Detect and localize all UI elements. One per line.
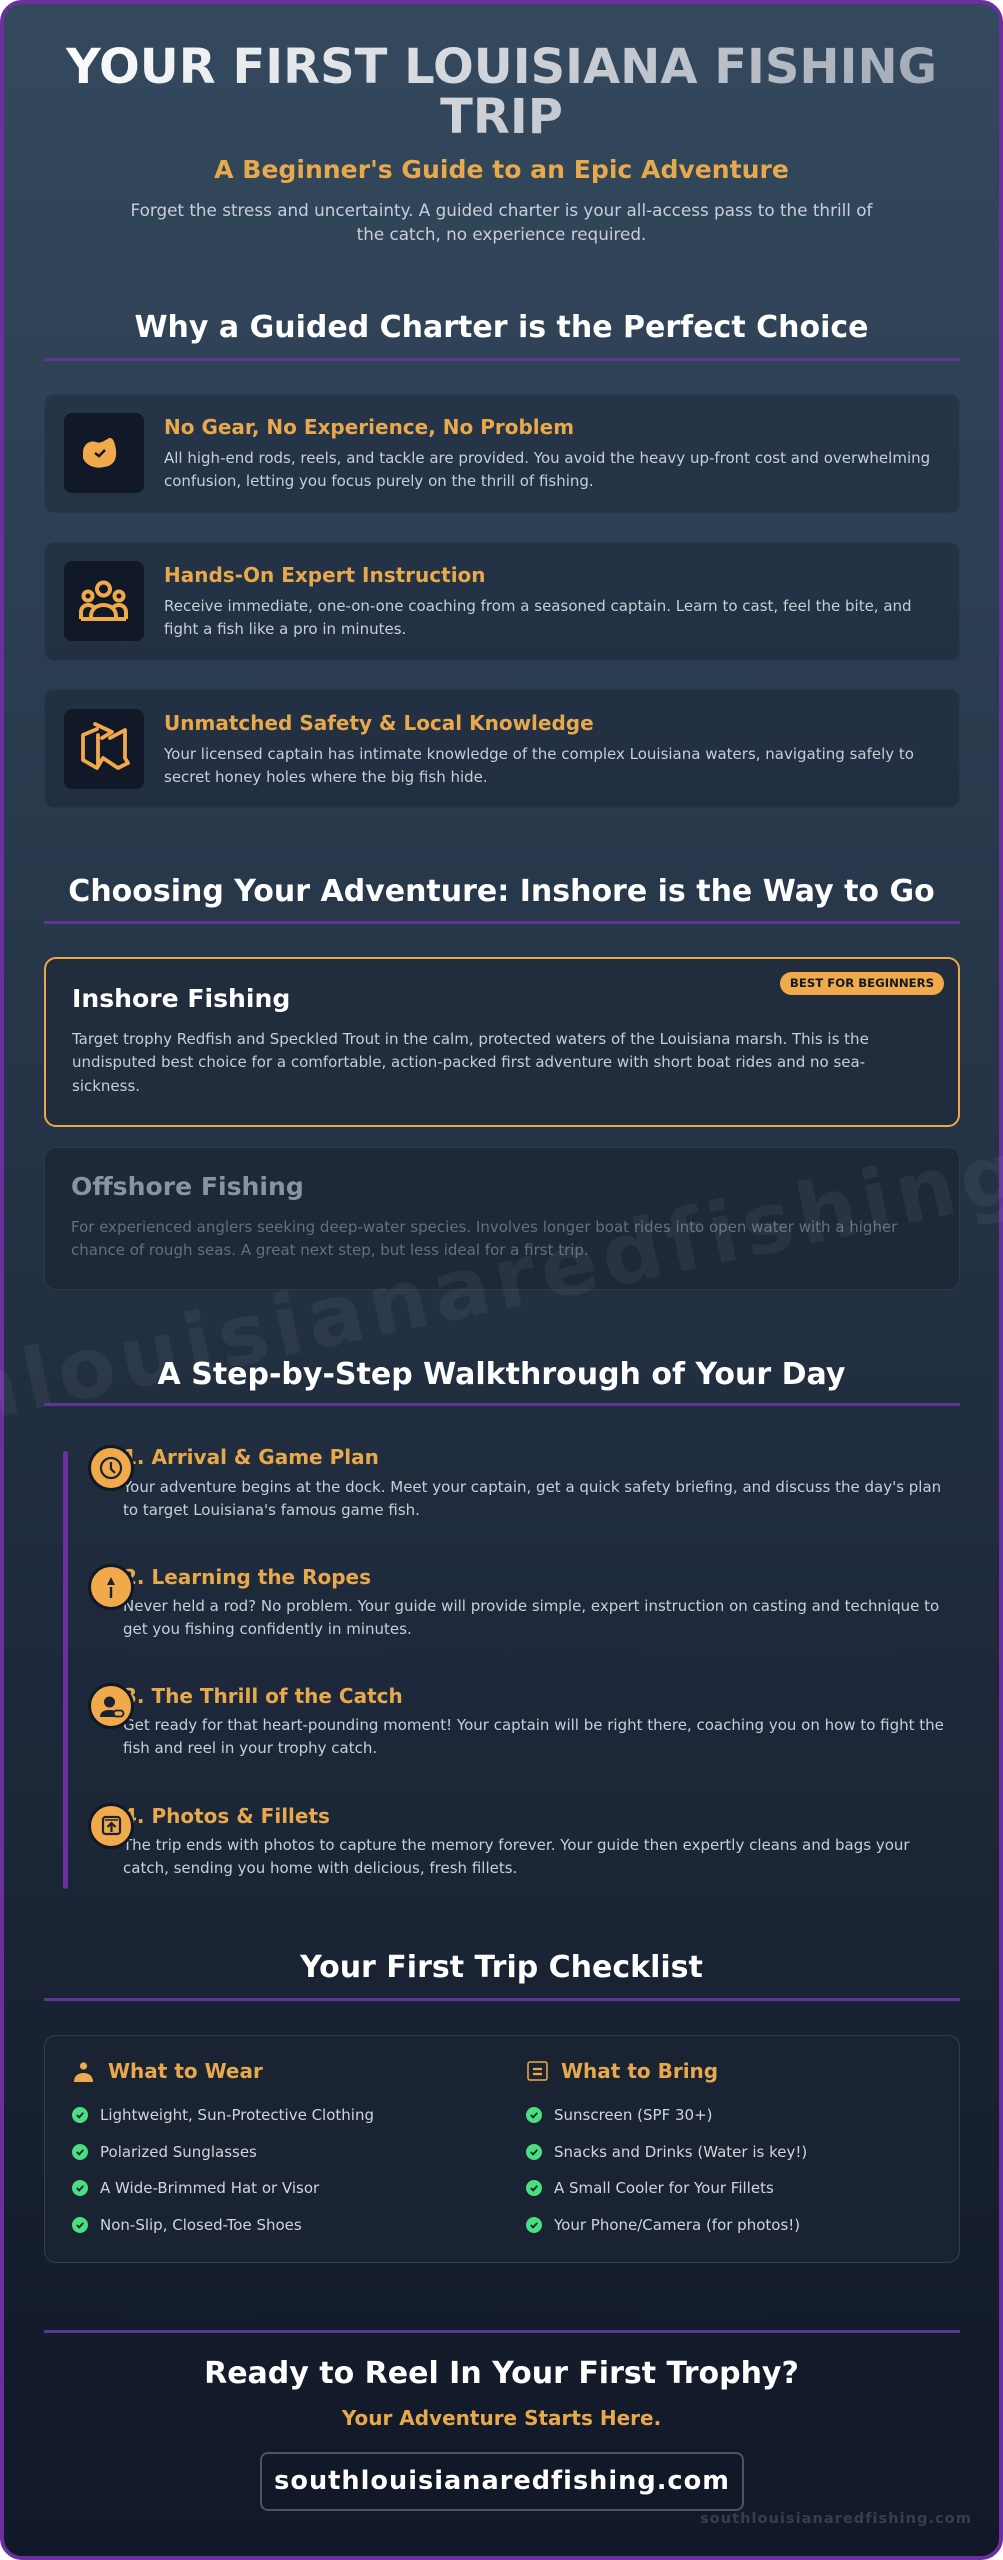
inshore text: sickness. bbox=[72, 1077, 140, 1095]
icon: folded map bbox=[64, 709, 144, 789]
check item bbox=[72, 2107, 88, 2123]
offshore title: Offshore Fishing bbox=[71, 1172, 304, 1201]
checklist: what to bring bbox=[526, 2106, 807, 2234]
intro text: Forget the stress and uncertainty. A guided charter is your all-access pass to the thrill of bbox=[131, 200, 872, 220]
step text: fish and reel in your trophy catch. bbox=[123, 1739, 377, 1757]
panel: expert instruction bbox=[44, 542, 960, 661]
step text: to target Louisiana's famous game fish. bbox=[123, 1501, 420, 1519]
intro text bbox=[131, 200, 873, 244]
card text: Receive immediate, one-on-one coaching from a seasoned captain. Learn to cast, feel the bite, and bbox=[164, 597, 912, 615]
check item bbox=[72, 2144, 88, 2160]
check item bbox=[526, 2217, 542, 2233]
step text bbox=[123, 1597, 939, 1638]
badge: best for beginners bbox=[780, 972, 944, 995]
panel: checklist bbox=[44, 2035, 960, 2263]
icon: group of people bbox=[64, 561, 144, 641]
heading: why a guided charter: Why a Guided Charter is the Perfect Choice bbox=[134, 310, 869, 345]
checklist: what to wear bbox=[72, 2106, 374, 2234]
card text bbox=[164, 597, 912, 638]
icon: person bbox=[74, 2062, 93, 2082]
check item bbox=[72, 2180, 88, 2196]
what to bring title: What to Bring bbox=[561, 2059, 718, 2083]
item text: Non-Slip, Closed-Toe Shoes bbox=[100, 2216, 302, 2234]
title: YOUR FIRST LOUISIANA FISHING bbox=[66, 39, 937, 95]
item text: Sunscreen (SPF 30+) bbox=[554, 2106, 712, 2124]
panel: no gear bbox=[44, 394, 960, 513]
inshore text: undisputed best choice for a comfortable, action-packed first adventure with short boat rides and no sea- bbox=[72, 1053, 865, 1071]
item text: Polarized Sunglasses bbox=[100, 2142, 257, 2160]
item text: A Wide-Brimmed Hat or Visor bbox=[100, 2179, 319, 2197]
card text: confusion, letting you focus purely on the thrill of fishing. bbox=[164, 472, 594, 490]
step text: Get ready for that heart-pounding moment! Your captain will be right there, coaching you on how to fight the bbox=[123, 1716, 944, 1734]
subtitle: A Beginner's Guide to an Epic Adventure bbox=[214, 155, 789, 184]
step text: Never held a rod? No problem. Your guide will provide simple, expert instruction on casting and technique to bbox=[123, 1597, 939, 1615]
offshore text: chance of rough seas. A great next step, but less ideal for a first trip. bbox=[71, 1241, 589, 1259]
step title: 3. The Thrill of the Catch bbox=[123, 1684, 403, 1708]
panel: safety bbox=[44, 689, 960, 808]
step text bbox=[123, 1716, 944, 1757]
card title: No Gear, No Experience, No Problem bbox=[164, 415, 574, 439]
footer heading: Ready to Reel In Your First Trophy? bbox=[204, 2356, 799, 2391]
title bbox=[50, 42, 953, 142]
card title: Hands-On Expert Instruction bbox=[164, 563, 486, 587]
check item bbox=[526, 2180, 542, 2196]
check item bbox=[526, 2144, 542, 2160]
title: TRIP bbox=[440, 89, 563, 145]
card title: Unmatched Safety & Local Knowledge bbox=[164, 711, 594, 735]
step text: The trip ends with photos to capture the memory forever. Your guide then expertly cleans and bags your bbox=[123, 1836, 910, 1854]
card text: Your licensed captain has intimate knowledge of the complex Louisiana waters, navigating safely to bbox=[164, 745, 914, 763]
inshore text: Target trophy Redfish and Speckled Trout in the calm, protected waters of the Louisiana marsh. This is the bbox=[72, 1030, 869, 1048]
url box: southlouisianaredfishing.com bbox=[274, 2466, 730, 2496]
offshore text bbox=[71, 1218, 898, 1259]
step text bbox=[123, 1836, 910, 1877]
small watermark: southlouisianaredfishing.com bbox=[700, 2510, 972, 2527]
inshore title: Inshore Fishing bbox=[72, 984, 290, 1013]
icon: arrow up bbox=[88, 1564, 134, 1610]
heading: walkthrough: A Step-by-Step Walkthrough of Your Day bbox=[158, 1357, 845, 1392]
offshore text: For experienced anglers seeking deep-water species. Involves longer boat rides into open water with a higher bbox=[71, 1218, 897, 1236]
heading: choosing your adventure: Choosing Your Adventure: Inshore is the Way to Go bbox=[68, 874, 935, 909]
badge: best for beginners: BEST FOR BEGINNERS bbox=[790, 976, 934, 990]
icon: list box bbox=[527, 2061, 548, 2081]
panel: inshore fishing bbox=[44, 957, 960, 1127]
item text: Snacks and Drinks (Water is key!) bbox=[554, 2142, 807, 2160]
icon: person bbox=[88, 1683, 134, 1729]
heading: checklist: Your First Trip Checklist bbox=[300, 1950, 703, 1985]
card text: fight a fish like a pro in minutes. bbox=[164, 620, 406, 638]
item text: Lightweight, Sun-Protective Clothing bbox=[100, 2106, 374, 2124]
icon: clock bbox=[88, 1445, 134, 1491]
step title: 2. Learning the Ropes bbox=[123, 1565, 371, 1589]
footer subheading: Your Adventure Starts Here. bbox=[342, 2406, 661, 2430]
card text bbox=[164, 745, 914, 786]
card text: secret honey holes where the big fish hide. bbox=[164, 768, 488, 786]
step text: catch, sending you home with delicious, fresh fillets. bbox=[123, 1859, 517, 1877]
step text bbox=[123, 1478, 941, 1519]
check item bbox=[526, 2107, 542, 2123]
inshore text bbox=[72, 1030, 869, 1095]
step title: 4. Photos & Fillets bbox=[123, 1804, 330, 1828]
step title: 1. Arrival & Game Plan bbox=[123, 1445, 379, 1469]
icon: photo bbox=[88, 1803, 134, 1849]
item text: A Small Cooler for Your Fillets bbox=[554, 2179, 774, 2197]
timeline bar bbox=[63, 1451, 68, 1889]
card text bbox=[164, 449, 930, 490]
url box bbox=[260, 2452, 744, 2511]
intro text: the catch, no experience required. bbox=[357, 224, 646, 244]
item text: Your Phone/Camera (for photos!) bbox=[554, 2216, 800, 2234]
panel: offshore fishing bbox=[44, 1147, 960, 1290]
check item bbox=[72, 2217, 88, 2233]
card text: All high-end rods, reels, and tackle are provided. You avoid the heavy up-front cost and overwhelming bbox=[164, 449, 930, 467]
step text: get you fishing confidently in minutes. bbox=[123, 1620, 412, 1638]
step text: Your adventure begins at the dock. Meet your captain, get a quick safety briefing, and discuss the day's plan bbox=[123, 1478, 941, 1496]
icon: gear blob bbox=[64, 413, 144, 493]
what to wear title: What to Wear bbox=[108, 2059, 263, 2083]
